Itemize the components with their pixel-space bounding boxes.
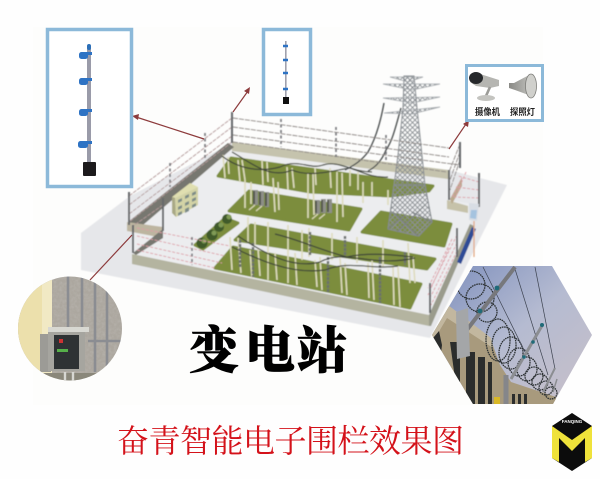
transformers — [249, 190, 332, 219]
blue cable strip — [457, 227, 476, 264]
trees — [196, 214, 232, 248]
office building — [172, 183, 198, 217]
power lines from tower — [345, 103, 401, 171]
title third character: 站 — [297, 323, 347, 379]
building wall — [430, 307, 556, 406]
photo: controller box on wall — [18, 276, 122, 380]
left wall — [128, 143, 234, 231]
fence back wires — [233, 118, 460, 190]
transmission tower — [383, 76, 440, 236]
title: 变 — [189, 323, 241, 379]
small base box — [283, 97, 289, 104]
arrow to post detail — [132, 114, 204, 139]
inner slab floor — [132, 145, 478, 315]
small pole — [285, 41, 287, 98]
insulators — [78, 52, 92, 148]
pole cap — [87, 44, 91, 50]
small insulators — [283, 46, 288, 89]
substation 3D scene — [81, 76, 507, 338]
label: camera: 摄像机 — [475, 106, 500, 117]
callout: post detail large — [48, 30, 132, 186]
device on fence corner — [469, 203, 479, 257]
title second character: 电 — [245, 323, 295, 379]
logo M — [552, 426, 592, 462]
intermediate fence posts — [170, 119, 386, 265]
photo: electric fence on wall — [430, 264, 595, 406]
logo text: FANQING — [562, 419, 583, 424]
overhead conductors — [222, 152, 415, 271]
icon: camera — [469, 72, 499, 101]
line to controller photo — [90, 235, 132, 280]
icon: searchlight — [509, 74, 536, 98]
controller panel — [54, 335, 79, 369]
fence posts — [468, 266, 516, 330]
windows — [433, 331, 527, 404]
pole — [87, 47, 91, 162]
controller housing — [48, 332, 85, 371]
controller door — [40, 334, 51, 372]
inner corner wall — [133, 229, 163, 255]
label: searchlight: 探照灯 — [510, 106, 535, 117]
callout: post detail small — [264, 30, 310, 114]
fence front and side alarm wires — [137, 172, 479, 305]
grass panels — [195, 158, 451, 308]
fence posts — [129, 112, 479, 313]
insulators — [478, 286, 544, 359]
post bracket — [456, 308, 470, 359]
arrow to camera box — [449, 120, 469, 149]
base box — [83, 162, 96, 176]
back wall — [232, 142, 448, 179]
steel lattice masts — [240, 232, 405, 303]
white support poles — [223, 155, 415, 307]
base platform — [81, 143, 507, 338]
subtitle: 奋青智能电子围栏效果图 — [117, 423, 464, 459]
fence left wires — [129, 118, 232, 226]
front wall — [132, 254, 429, 326]
right corner block — [447, 177, 468, 213]
razor wire coils — [457, 271, 557, 399]
logo — [552, 413, 592, 471]
fence wires — [483, 267, 555, 375]
corner beige block — [127, 222, 163, 238]
callout: camera and searchlight — [466, 66, 542, 120]
arrows — [90, 87, 469, 280]
right wall — [429, 224, 474, 326]
wall foot — [43, 373, 97, 380]
arrow to post detail 2 — [233, 87, 250, 112]
